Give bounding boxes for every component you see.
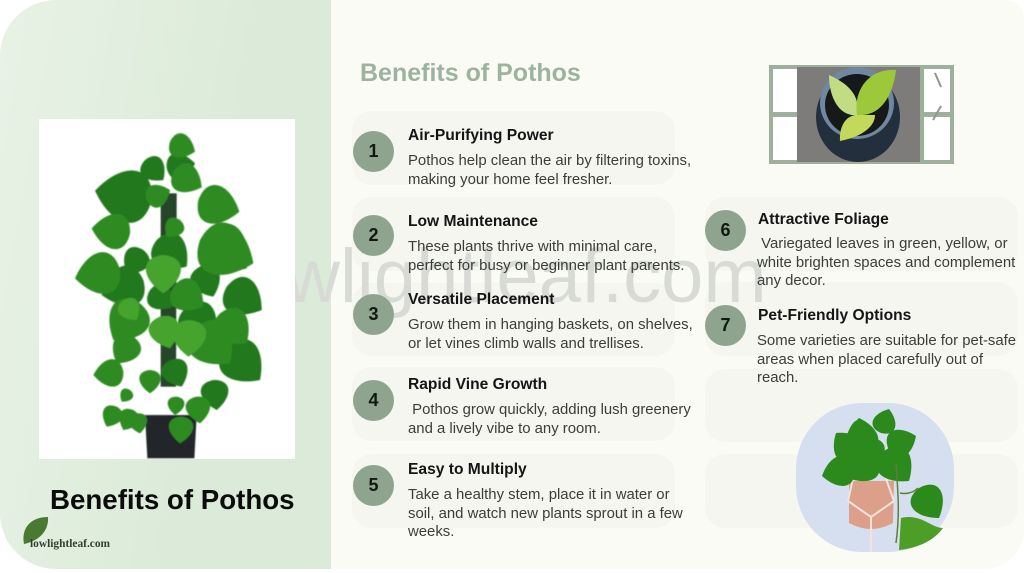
image: framed potted seedling xyxy=(769,65,954,164)
item 2: Low Maintenance xyxy=(408,213,538,230)
heading: Benefits of Pothos xyxy=(360,59,581,87)
item 3: Versatile Placement xyxy=(408,291,554,308)
item 6: Variegated leaves in green, yellow, or white brighten spaces and complement any decor. xyxy=(757,236,1015,289)
item 5 xyxy=(353,461,683,540)
item 6: Attractive Foliage xyxy=(758,211,889,228)
watermark: lowlightleaf.com xyxy=(226,234,767,319)
image: pothos plant on moss pole xyxy=(39,119,295,459)
item 7: Some varieties are suitable for pet-safe areas when placed carefully out of reach. xyxy=(757,333,1016,386)
item 5: 5 xyxy=(368,475,378,495)
icon: leaf xyxy=(23,517,48,544)
item 5: Easy to Multiply xyxy=(408,461,527,478)
item 2 xyxy=(353,213,684,274)
item 1: 1 xyxy=(368,141,378,161)
item 1: Pothos help clean the air by filtering toxins, making your home feel fresher. xyxy=(408,153,691,188)
left green panel xyxy=(0,0,331,569)
item 4 xyxy=(353,376,691,437)
item 7: Pet-Friendly Options xyxy=(758,307,911,324)
item 4: Rapid Vine Growth xyxy=(408,376,547,393)
image: hanging pothos in pink pot xyxy=(796,403,954,552)
item 7: 7 xyxy=(720,315,730,335)
item 1: Air-Purifying Power xyxy=(408,127,554,144)
item 4: Pothos grow quickly, adding lush greenery and a lively vibe to any room. xyxy=(408,402,691,437)
item 6: 6 xyxy=(720,220,730,240)
logo xyxy=(23,517,110,550)
left title: Benefits of Pothos xyxy=(50,484,295,515)
item 6 xyxy=(705,210,1016,289)
item 2: 2 xyxy=(368,225,378,245)
item 3 xyxy=(353,291,693,352)
item 7 xyxy=(705,305,1016,386)
item 3: Grow them in hanging baskets, on shelves, or let vines climb walls and trellises. xyxy=(408,317,693,352)
item 3: 3 xyxy=(368,304,378,324)
item 5: Take a healthy stem, place it in water or soil, and watch new plants sprout in a few weeks. xyxy=(408,487,683,540)
item 4: 4 xyxy=(368,390,378,410)
item 1 xyxy=(353,127,691,188)
logo text: lowlightleaf.com xyxy=(30,538,110,550)
item 2: These plants thrive with minimal care, perfect for busy or beginner plant parents. xyxy=(408,239,684,274)
